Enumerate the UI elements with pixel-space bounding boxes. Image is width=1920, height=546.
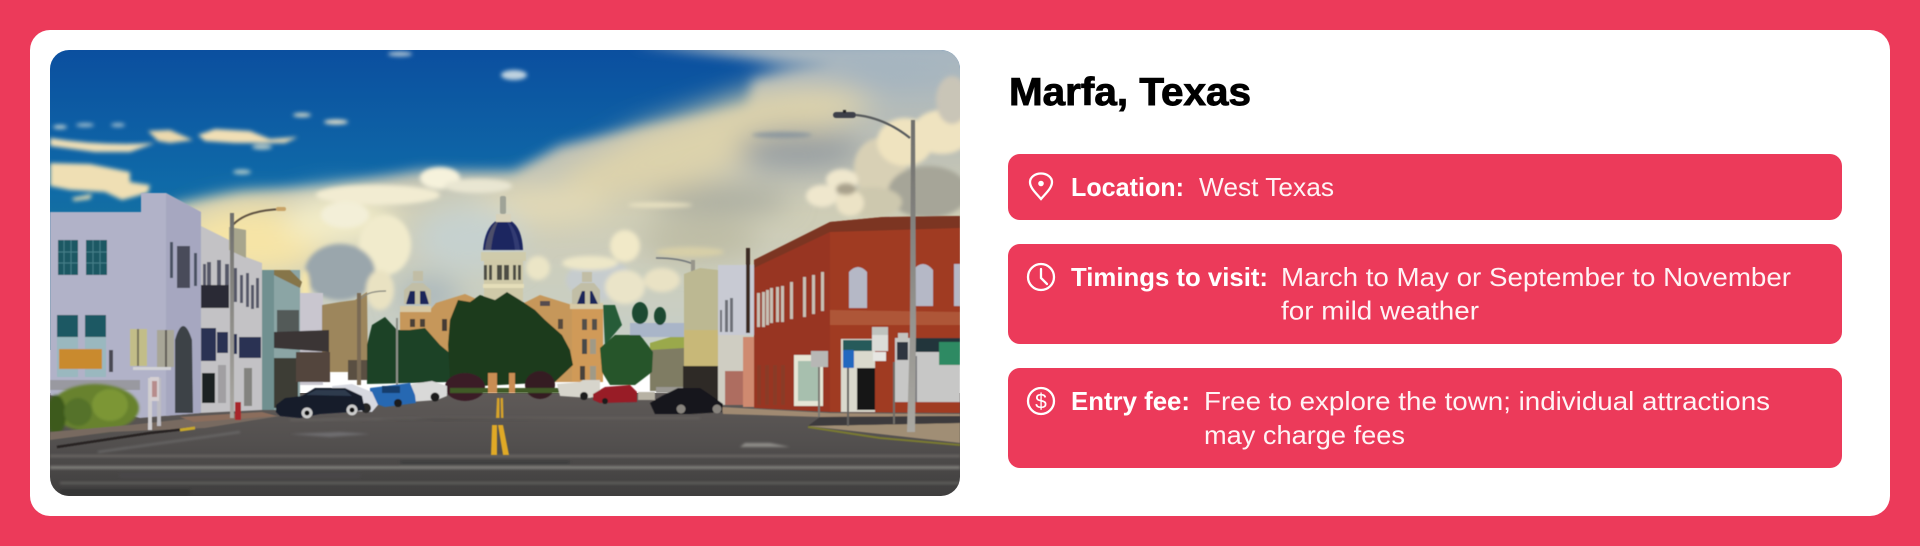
- photo: Marfa street with courthouse: [46, 40, 980, 496]
- sign post: [133, 367, 171, 430]
- grey stripes: [752, 132, 812, 138]
- trees: [367, 292, 653, 401]
- parked cars left: [276, 381, 447, 418]
- left buildings: [50, 193, 330, 418]
- hydrant: [235, 402, 241, 420]
- icon: clock: [1028, 264, 1054, 290]
- left side tower: [413, 271, 423, 281]
- mid right clouds: [566, 264, 626, 299]
- courthouse: [400, 196, 603, 382]
- location value: West Texas: [1199, 172, 1334, 202]
- white deco building: [201, 226, 262, 413]
- storm grey patch: [305, 244, 375, 300]
- panel: entry fee: [1008, 368, 1842, 468]
- black car right: [650, 388, 723, 414]
- white cumulus centre: [420, 167, 460, 189]
- icon: dollar coin: $: [1035, 390, 1047, 414]
- bush: [46, 384, 139, 435]
- timings value: for mild weather: [1281, 296, 1479, 326]
- right side tower: [582, 272, 592, 282]
- timings label: Timings to visit:: [1071, 262, 1268, 292]
- parked cars right: [557, 380, 684, 404]
- entry fee value: may charge fees: [1204, 420, 1405, 450]
- main block: [399, 294, 573, 383]
- road: [50, 393, 960, 496]
- arch: [175, 326, 193, 413]
- entry fee label: Entry fee:: [1071, 386, 1190, 416]
- background buildings: [297, 292, 685, 391]
- title: Marfa, Texas: [1009, 71, 1251, 114]
- icon: map pin: [1030, 174, 1052, 199]
- distant lamp: [357, 291, 398, 386]
- left street lamp: [230, 207, 286, 418]
- right street lamp small: [656, 256, 696, 272]
- location label: Location:: [1071, 172, 1184, 202]
- timings value: [1281, 262, 1791, 326]
- left upper clouds: [50, 138, 155, 152]
- right cauliflower cloud: [854, 138, 906, 198]
- dome: [483, 221, 523, 250]
- street signs: [811, 327, 908, 426]
- yellow centre lines: [491, 398, 509, 455]
- red brick building: [754, 216, 960, 413]
- entry fee value: [1204, 386, 1770, 450]
- panel: location: [1008, 154, 1842, 220]
- central tower: [481, 252, 526, 261]
- panel: timings to visit: [1008, 244, 1842, 344]
- entry fee value: Free to explore the town; individual attractions: [1204, 386, 1770, 416]
- big lavender building: [50, 193, 201, 418]
- windows: [57, 240, 107, 337]
- tan/teal building: [274, 270, 301, 411]
- timings value: March to May or September to November: [1281, 262, 1791, 292]
- sidewalks: [50, 407, 960, 447]
- right street lamp: [833, 110, 916, 432]
- right-side mid buildings: [683, 248, 754, 407]
- icon: dollar coin: [1028, 388, 1054, 414]
- sky: [50, 40, 980, 360]
